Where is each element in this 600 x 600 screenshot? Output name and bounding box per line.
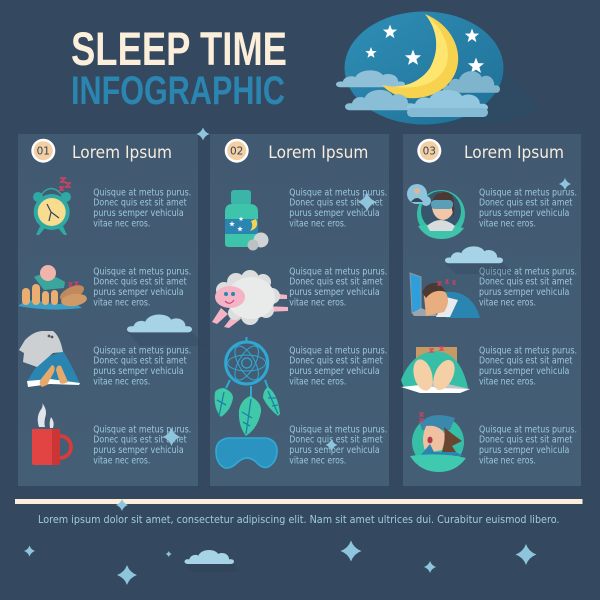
text block 3-3 (479, 345, 577, 387)
icon: sleep mask (216, 438, 277, 468)
icon: ghost nightmare (19, 331, 80, 387)
text block 3-3: Donec quis est sit amet (479, 356, 572, 367)
text block 1-2: Quisque at metus purus. (93, 266, 191, 277)
heading 1: Lorem Ipsum (72, 143, 172, 163)
text block 1-1: vitae nec eros. (93, 218, 150, 229)
number badge 01 (31, 139, 55, 163)
text block 3-1: Donec quis est sit amet (479, 198, 572, 209)
text block 2-3: purus semper vehicula (289, 366, 380, 377)
number badge 02: 02 (230, 146, 243, 158)
text block 1-1: Donec quis est sit amet (93, 198, 187, 209)
text block 3-4: Donec quis est sit amet (479, 435, 572, 446)
icon: red coffee mug (32, 403, 71, 465)
text block 3-4: Quisque at metus purus. (479, 424, 577, 435)
text block 1-4: vitae nec eros. (93, 455, 150, 466)
text block 1-2: Donec quis est sit amet (93, 277, 187, 288)
divider bar (15, 499, 582, 504)
text block 2-1 (289, 187, 387, 229)
text block 2-2: purus semper vehicula (289, 287, 380, 298)
text block 2-2: Donec quis est sit amet (289, 277, 383, 288)
text block 2-4 (289, 424, 387, 466)
icon: baby and parents feet (18, 265, 88, 310)
text block 1-3: Quisque at metus purus. (93, 345, 191, 356)
icon: dreaming woman with mask (407, 184, 465, 239)
heading 3: Lorem Ipsum (464, 143, 564, 163)
text block 3-3: purus semper vehicula (479, 366, 569, 377)
text block 1-3 (93, 345, 191, 387)
icon: asleep at laptop (410, 273, 480, 318)
title: INFOGRAPHIC (71, 69, 285, 113)
panel: column 2 (210, 134, 389, 486)
heading 2: Lorem Ipsum (268, 143, 368, 163)
panel: column 3 (401, 134, 581, 486)
icon: sheep (212, 270, 288, 328)
text block 2-1: Quisque at metus purus. (289, 187, 387, 198)
illustration: moon and clouds (336, 12, 540, 125)
text block 1-4 (93, 424, 191, 466)
icon: yawning person in bed (410, 413, 466, 472)
title (71, 22, 287, 113)
sparkles: over panels (162, 128, 571, 451)
text block 2-4: Donec quis est sit amet (289, 435, 383, 446)
text block 1-3: purus semper vehicula (93, 366, 184, 377)
text block 3-3: vitae nec eros. (479, 376, 536, 387)
text block 3-2: vitae nec eros. (479, 297, 536, 308)
number badge 03: 03 (423, 146, 436, 158)
text block 1-4: purus semper vehicula (93, 445, 184, 456)
text block 3-2: Donec quis est sit amet (479, 277, 572, 288)
text block 1-1: Quisque at metus purus. (93, 187, 191, 198)
panel: column 1 (18, 134, 198, 486)
text block 3-1 (479, 187, 577, 229)
text block 2-1: Donec quis est sit amet (289, 198, 383, 209)
cloud: bottom (184, 550, 240, 572)
text block 2-2 (289, 266, 387, 308)
icon: alarm clock (33, 178, 71, 235)
text block 1-2: vitae nec eros. (93, 297, 150, 308)
text block 3-4 (479, 424, 577, 466)
text block 3-1: vitae nec eros. (479, 218, 536, 229)
text block 1-1 (93, 187, 191, 229)
text block 3-3: Quisque at metus purus. (479, 345, 577, 356)
text block 1-2: purus semper vehicula (93, 287, 184, 298)
text block 1-4: Quisque at metus purus. (93, 424, 191, 435)
cloud: column 3 (445, 246, 514, 274)
text block 3-2 (479, 266, 577, 308)
text block 1-3: vitae nec eros. (93, 376, 150, 387)
text block 2-2: Quisque at metus purus. (289, 266, 387, 277)
text block 2-4: purus semper vehicula (289, 445, 380, 456)
text block 3-2: Quisque at metus purus. (479, 266, 577, 277)
text block 2-4: Quisque at metus purus. (289, 424, 387, 435)
number badge 01: 01 (37, 146, 50, 158)
text block 1-3: Donec quis est sit amet (93, 356, 187, 367)
text block 3-2: purus semper vehicula (479, 287, 569, 298)
sparkles: bottom (24, 540, 536, 585)
text block 2-3: Donec quis est sit amet (289, 356, 383, 367)
icon: feet in bed (401, 347, 470, 393)
title: SLEEP TIME (71, 22, 287, 75)
text block 1-1: purus semper vehicula (93, 208, 184, 219)
cloud: column 1 (127, 315, 205, 346)
text block 3-1: purus semper vehicula (479, 208, 569, 219)
text block 3-4: vitae nec eros. (479, 455, 536, 466)
text block 1-4: Donec quis est sit amet (93, 435, 187, 446)
text block 2-3: vitae nec eros. (289, 376, 346, 387)
text block 2-3: Quisque at metus purus. (289, 345, 387, 356)
text block 2-4: vitae nec eros. (289, 455, 346, 466)
text block 3-1: Quisque at metus purus. (479, 187, 577, 198)
text block 2-1: purus semper vehicula (289, 208, 380, 219)
number badge 02 (225, 139, 249, 163)
icon: sleeping pills bottle (225, 190, 268, 250)
text block 3-4: purus semper vehicula (479, 445, 569, 456)
text block 2-3 (289, 345, 387, 387)
icon: dreamcatcher (215, 337, 280, 436)
number badge 03 (417, 139, 441, 163)
text block 1-2 (93, 266, 191, 308)
text block 2-2: vitae nec eros. (289, 297, 346, 308)
text block 2-1: vitae nec eros. (289, 218, 346, 229)
sparkle: on bar (116, 499, 128, 511)
